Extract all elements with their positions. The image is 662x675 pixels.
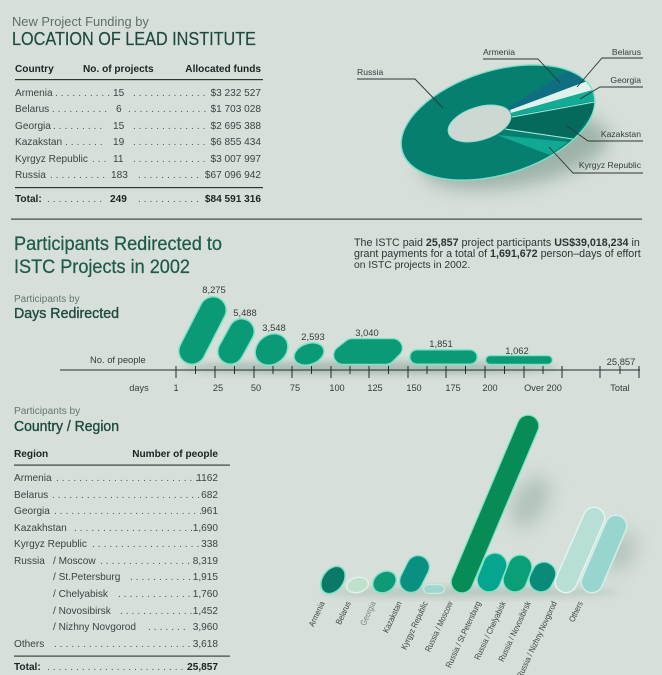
axis labels: 175 xyxy=(445,383,461,393)
table: participants by region: ............. xyxy=(120,606,195,617)
table: participants by region: Armenia xyxy=(14,473,52,484)
table: funding by country: Georgia xyxy=(15,121,51,132)
table: funding by country: $6 855 434 xyxy=(210,137,261,148)
table: funding by country: .......... xyxy=(50,170,108,181)
table: participants by region: ................ xyxy=(100,556,193,567)
donut leader labels xyxy=(357,47,643,173)
table: funding by country: .......... xyxy=(47,194,105,205)
heading: days redirected: Days Redirected xyxy=(14,306,119,322)
text block: ISTC payments xyxy=(354,237,641,271)
heading: country / region xyxy=(14,406,119,435)
table: funding by country: .......... xyxy=(55,88,113,99)
table: participants by region: 682 xyxy=(201,490,218,501)
table: participants by region: 338 xyxy=(201,539,218,550)
values above pills: No. of people xyxy=(90,354,146,365)
table: funding by country: Armenia xyxy=(15,88,53,99)
axis labels: days xyxy=(129,383,149,393)
pill: 1-25 days xyxy=(192,310,213,351)
table: participants by region: 3,618 xyxy=(193,639,218,650)
pill: Georgia xyxy=(369,567,400,597)
heading: new project funding: LOCATION OF LEAD INSTITUTE xyxy=(12,29,256,49)
table: funding by country: Total: xyxy=(15,194,42,205)
donut chart: funding by location xyxy=(400,64,616,198)
pill: Belarus xyxy=(345,575,370,595)
wedge: Belarus xyxy=(510,82,592,113)
values above pills: 1,851 xyxy=(429,338,453,349)
rotated country labels: Armenia xyxy=(307,599,327,628)
rotated country labels: Russia / Chelyabisk xyxy=(472,600,508,661)
axis labels: 200 xyxy=(482,383,498,393)
axis labels: 25 xyxy=(213,383,223,393)
table: participants by region: Kazakhstan xyxy=(14,523,67,534)
table: participants by region: Russia xyxy=(14,556,45,567)
table: funding by country: 183 xyxy=(111,170,128,181)
pill chart: participants by days redirected xyxy=(180,310,560,374)
table: funding by country: $3 007 997 xyxy=(210,154,261,165)
table: participants by region: Georgia xyxy=(14,506,50,517)
pill: Russia Chelyabisk xyxy=(515,567,520,580)
table: participants by region: / Nizhny Novgorod xyxy=(53,622,136,633)
rotated country labels xyxy=(307,599,585,675)
table: funding by country: ............. xyxy=(133,121,208,132)
pill: Kyrgyz Republic xyxy=(428,584,440,594)
table: funding by country: 19 xyxy=(113,137,125,148)
heading: new project funding xyxy=(12,14,256,49)
rotated country labels: Russia / Novosibirsk xyxy=(497,600,533,663)
rotated country labels: Russia / Moscow xyxy=(423,600,455,653)
axis labels: 100 xyxy=(329,383,345,393)
pill: 100-150 days xyxy=(343,348,393,355)
rotated country labels: Kyrgyz Republic xyxy=(399,600,430,651)
text block: ISTC payments: The ISTC paid 25,857 project participants US$39,018,234 in xyxy=(354,237,640,249)
table: participants by region: ........................ xyxy=(54,639,193,650)
table: participants by region: .......................... xyxy=(52,490,203,501)
table: participants by region: ............. xyxy=(118,589,193,600)
table: funding by country: $67 096 942 xyxy=(205,170,261,181)
table: participants by region: 1,690 xyxy=(193,523,218,534)
table: participants by region: Total: xyxy=(14,662,41,673)
donut hole xyxy=(444,98,515,149)
pill chart: participants by country xyxy=(316,426,643,598)
wedge: Georgia xyxy=(511,90,594,116)
table: funding by country: .......... xyxy=(52,104,110,115)
table: participants by region: Region xyxy=(14,449,48,460)
table: participants by region: 1162 xyxy=(196,473,218,484)
table: funding by country: .............. xyxy=(128,104,209,115)
heading: country / region: Participants by xyxy=(14,406,81,417)
table: participants by region: 3,960 xyxy=(193,622,218,633)
table: funding by country: $1 703 028 xyxy=(210,104,261,115)
table: participants by region: ......................... xyxy=(56,473,201,484)
table: participants by region: Kyrgyz Republic xyxy=(14,539,87,550)
table: participants by region: Belarus xyxy=(14,490,48,501)
table: funding by country: ......... xyxy=(53,121,105,132)
heading: participants redirected xyxy=(14,234,222,278)
donut leader labels: Georgia xyxy=(610,75,641,85)
table: participants by region: ......................... xyxy=(47,662,192,673)
wedge: Kyrgyz Republic xyxy=(497,135,568,155)
rotated country labels: Russia / St.Petersburg xyxy=(444,600,483,669)
axis labels: Over 200 xyxy=(524,383,562,393)
table: participants by region: 25,857 xyxy=(187,662,218,673)
table: funding by country: 11 xyxy=(113,154,124,165)
table: funding by country: ............. xyxy=(133,137,208,148)
table: participants by region: ..................... xyxy=(74,523,196,534)
pill: Armenia xyxy=(316,562,350,598)
heading: participants redirected: ISTC Projects in 2002 xyxy=(14,257,190,278)
table: funding by country: 6 xyxy=(116,104,122,115)
heading: days redirected xyxy=(14,294,119,322)
donut leader labels: Russia xyxy=(357,67,383,77)
text block: ISTC payments: on ISTC projects in 2002. xyxy=(354,260,470,271)
values above pills: 3,040 xyxy=(355,327,379,338)
axis labels: 75 xyxy=(290,383,300,393)
rotated country labels: Others xyxy=(567,600,585,624)
table: participants by region: / Moscow xyxy=(53,556,96,567)
table: funding by country: Russia xyxy=(15,170,46,181)
table: participants by region: 1,452 xyxy=(193,606,218,617)
wedge: Armenia xyxy=(507,71,590,110)
axis labels xyxy=(129,383,630,393)
table: participants by region: 1,760 xyxy=(193,589,218,600)
values above pills: 1,062 xyxy=(505,345,529,356)
axis labels: 50 xyxy=(251,383,261,393)
text block: ISTC payments: grant payments for a total of 1,691,672 person–days of effort xyxy=(354,248,641,260)
values above pills: 8,275 xyxy=(202,284,226,295)
donut leader labels: Kazakstan xyxy=(601,129,641,139)
table: participants by region: 961 xyxy=(201,506,218,517)
table: participants by region: 8,319 xyxy=(193,556,218,567)
heading: days redirected: Participants by xyxy=(14,294,80,305)
table: funding by country: 249 xyxy=(110,194,127,205)
table: funding by country: ........... xyxy=(138,170,202,181)
table: funding by country: No. of projects xyxy=(83,64,154,75)
table: funding by country: Belarus xyxy=(15,104,49,115)
table: participants by region xyxy=(14,449,230,673)
table: participants by region: .......................... xyxy=(54,506,205,517)
table: funding by country: Kazakstan xyxy=(15,137,62,148)
pill: Others xyxy=(592,526,616,582)
pill: 75-100 days xyxy=(291,339,327,369)
table: funding by country: ............. xyxy=(133,154,208,165)
heading: new project funding: New Project Funding by xyxy=(12,14,149,29)
axis labels: Total xyxy=(610,383,630,393)
values above pills: 3,548 xyxy=(262,322,286,333)
values above pills: 25,857 xyxy=(607,356,635,367)
table: funding by country: ... xyxy=(92,154,109,165)
donut leader labels: Belarus xyxy=(612,47,641,57)
table: participants by region: / Novosibirsk xyxy=(53,606,112,617)
pill: 50-75 days xyxy=(249,327,294,372)
pill: Kazakhstan xyxy=(411,567,418,581)
table: funding by country: ........... xyxy=(138,194,202,205)
table: participants by region: / Chelyabisk xyxy=(53,589,109,600)
table: participants by region: ....... xyxy=(148,622,189,633)
values above pills: 2,593 xyxy=(301,331,325,342)
rotated country labels: Kazakstan xyxy=(381,600,404,634)
table: participants by region: Others xyxy=(14,639,44,650)
values above pills xyxy=(90,284,635,367)
pill: Russia Nizhny Novgorod xyxy=(566,518,594,582)
rotated country labels: Belarus xyxy=(334,600,353,626)
heading: country / region: Country / Region xyxy=(14,419,119,435)
table: funding by country: 15 xyxy=(113,121,125,132)
table: funding by country: ....... xyxy=(65,137,106,148)
table: funding by country: Allocated funds xyxy=(185,64,261,75)
table: funding by country: $3 232 527 xyxy=(210,88,261,99)
table: funding by country: ............. xyxy=(133,88,208,99)
table: funding by country: $2 695 388 xyxy=(210,121,261,132)
pill: 25-50 days xyxy=(230,332,242,352)
pill: Russia St.Petersburg xyxy=(489,565,495,580)
donut leader labels: Armenia xyxy=(483,47,515,57)
table: funding by country: Country xyxy=(15,64,54,75)
table: participants by region: Number of people xyxy=(132,449,218,460)
pill: Russia Moscow xyxy=(462,426,528,582)
axis labels: 150 xyxy=(406,383,422,393)
axis: days xyxy=(60,366,640,378)
table: participants by region: / St.Petersburg xyxy=(53,572,120,583)
table: funding by country: 15 xyxy=(113,88,125,99)
table: participants by region: 1,915 xyxy=(193,572,218,583)
pill: Russia Novosibirsk xyxy=(541,574,544,580)
rotated country labels: Georgia xyxy=(358,599,378,627)
pill: 150-200 days xyxy=(417,349,470,365)
table: participants by region: ................... xyxy=(92,539,202,550)
donut leader labels: Kyrgyz Republic xyxy=(579,160,642,170)
values above pills: 5,488 xyxy=(233,307,257,318)
wedge: Kazakhstan xyxy=(506,103,594,138)
pill: over 200 days xyxy=(490,355,548,365)
axis labels: 125 xyxy=(367,383,383,393)
table: funding by country: $84 591 316 xyxy=(205,194,261,205)
axis labels: 1 xyxy=(173,383,179,393)
heading: participants redirected: Participants Redirected to xyxy=(14,234,222,255)
table: funding by country xyxy=(15,64,263,205)
table: participants by region: ........... xyxy=(130,572,194,583)
table: funding by country: Kyrgyz Republic xyxy=(15,154,88,165)
